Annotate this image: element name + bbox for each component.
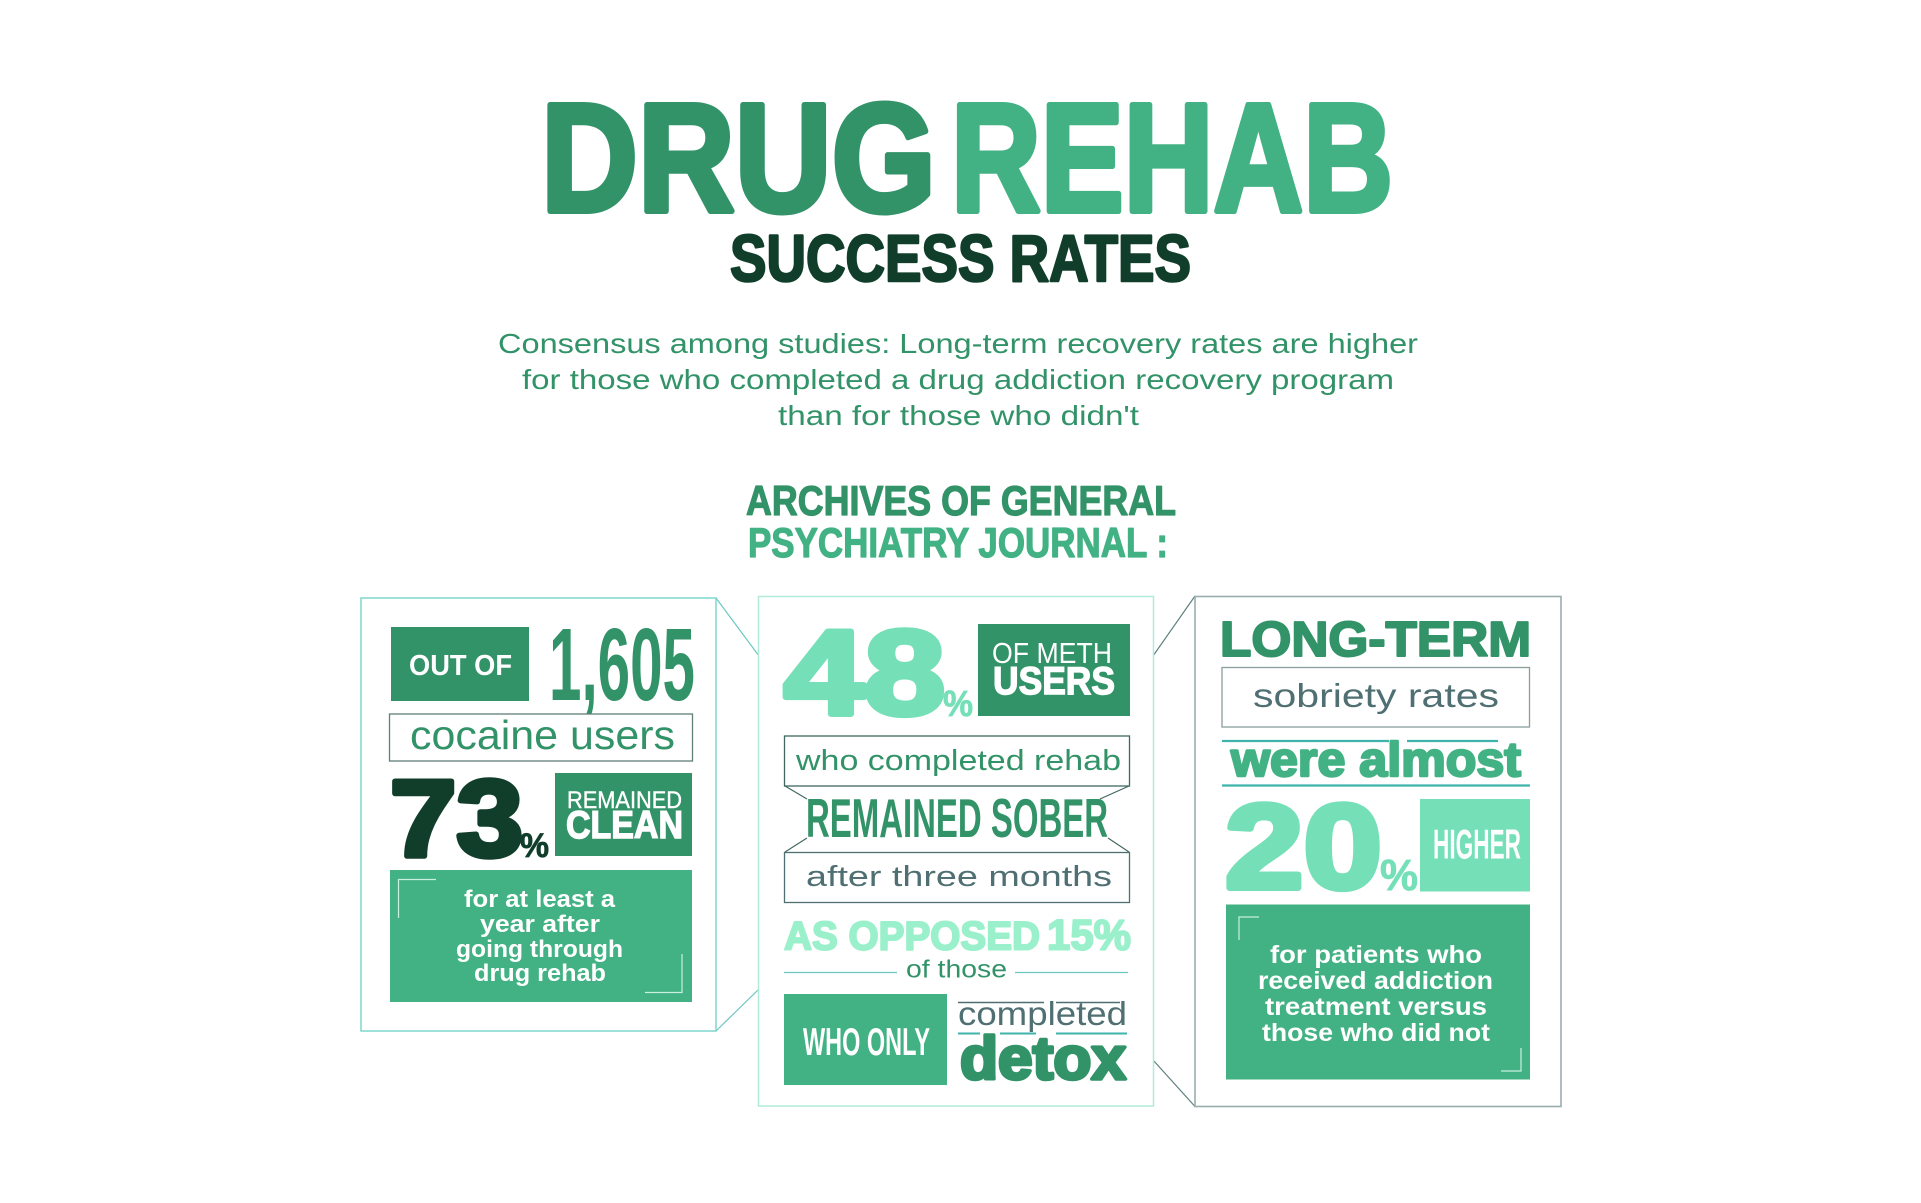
callout: for at least a year: drug rehab [474,960,606,987]
remained clean label: CLEAN [566,804,683,847]
higher label [1420,799,1530,892]
stat: 73%: % [520,827,549,865]
panel: cocaine users [361,598,716,1031]
stat: 20% [1225,780,1418,914]
higher label: HIGHER [1433,820,1521,868]
out of label [391,627,529,701]
callout: for patients who [1226,904,1530,1080]
sobriety rates box [1222,668,1530,727]
who only label [784,994,947,1085]
title word: DRUG: DRUG [541,72,936,244]
chevron connector lines [785,786,1129,852]
long-term heading: LONG-TERM [1220,613,1531,667]
remained clean label: REMAINED [567,787,682,814]
panel: long-term sobriety [1195,596,1561,1106]
sobriety rates box: sobriety rates [1253,677,1499,714]
intro paragraph [498,328,1418,431]
title word: REHAB: REHAB [951,72,1393,244]
stat: 73%: 73 [390,758,523,880]
callout: for patients who: those who did not [1262,1019,1491,1047]
were almost with rules: were almost [1230,734,1521,787]
title [541,72,1393,244]
out of label: OUT OF [409,650,512,682]
after three months box: after three months [806,861,1112,893]
callout: for patients who: treatment versus [1265,993,1487,1021]
of meth users label: OF METH [992,638,1112,670]
who completed rehab box: who completed rehab [795,745,1121,777]
of those divider: of those [906,956,1007,984]
subtitle: SUCCESS RATES [730,221,1191,295]
stat: 48%: % [943,683,973,724]
detox: detox [960,1025,1126,1092]
who only label: WHO ONLY [803,1021,930,1064]
panel: meth users [758,596,1154,1106]
intro paragraph: for those who completed a drug addiction recovery program [522,364,1394,395]
after three months box [784,852,1130,902]
callout: for patients who: for patients who [1270,941,1482,969]
callout: for at least a year: going through [456,936,623,963]
source heading: PSYCHIATRY JOURNAL : [748,519,1168,566]
who completed rehab box [784,736,1130,786]
remained clean label [555,773,692,856]
number 1,605: 1,605 [549,607,695,722]
as opposed 15% [784,912,1131,960]
remained sober heading: REMAINED SOBER [806,787,1108,849]
as opposed 15%: AS OPPOSED [784,914,1040,958]
callout: for at least a year: year after [480,911,600,938]
source heading [746,477,1176,566]
source heading: ARCHIVES OF GENERAL [746,477,1176,524]
of meth users label: USERS [993,660,1115,703]
cocaine users box: cocaine users [410,712,675,758]
intro paragraph: Consensus among studies: Long-term recovery rates are higher [498,328,1418,359]
callout: for at least a year: for at least a [464,886,616,913]
callout: for patients who: received addiction [1258,967,1493,995]
callout: for at least a year [390,870,692,1002]
connector lines between panels [716,596,1195,1106]
intro paragraph: than for those who didn't [778,400,1139,431]
stat: 20%: % [1380,851,1418,900]
as opposed 15%: 15% [1047,912,1131,960]
completed with rules: completed [958,995,1127,1032]
stat: 20%: 20 [1225,780,1382,914]
of meth users label [978,624,1130,716]
stat: 48%: 48 [784,606,945,740]
